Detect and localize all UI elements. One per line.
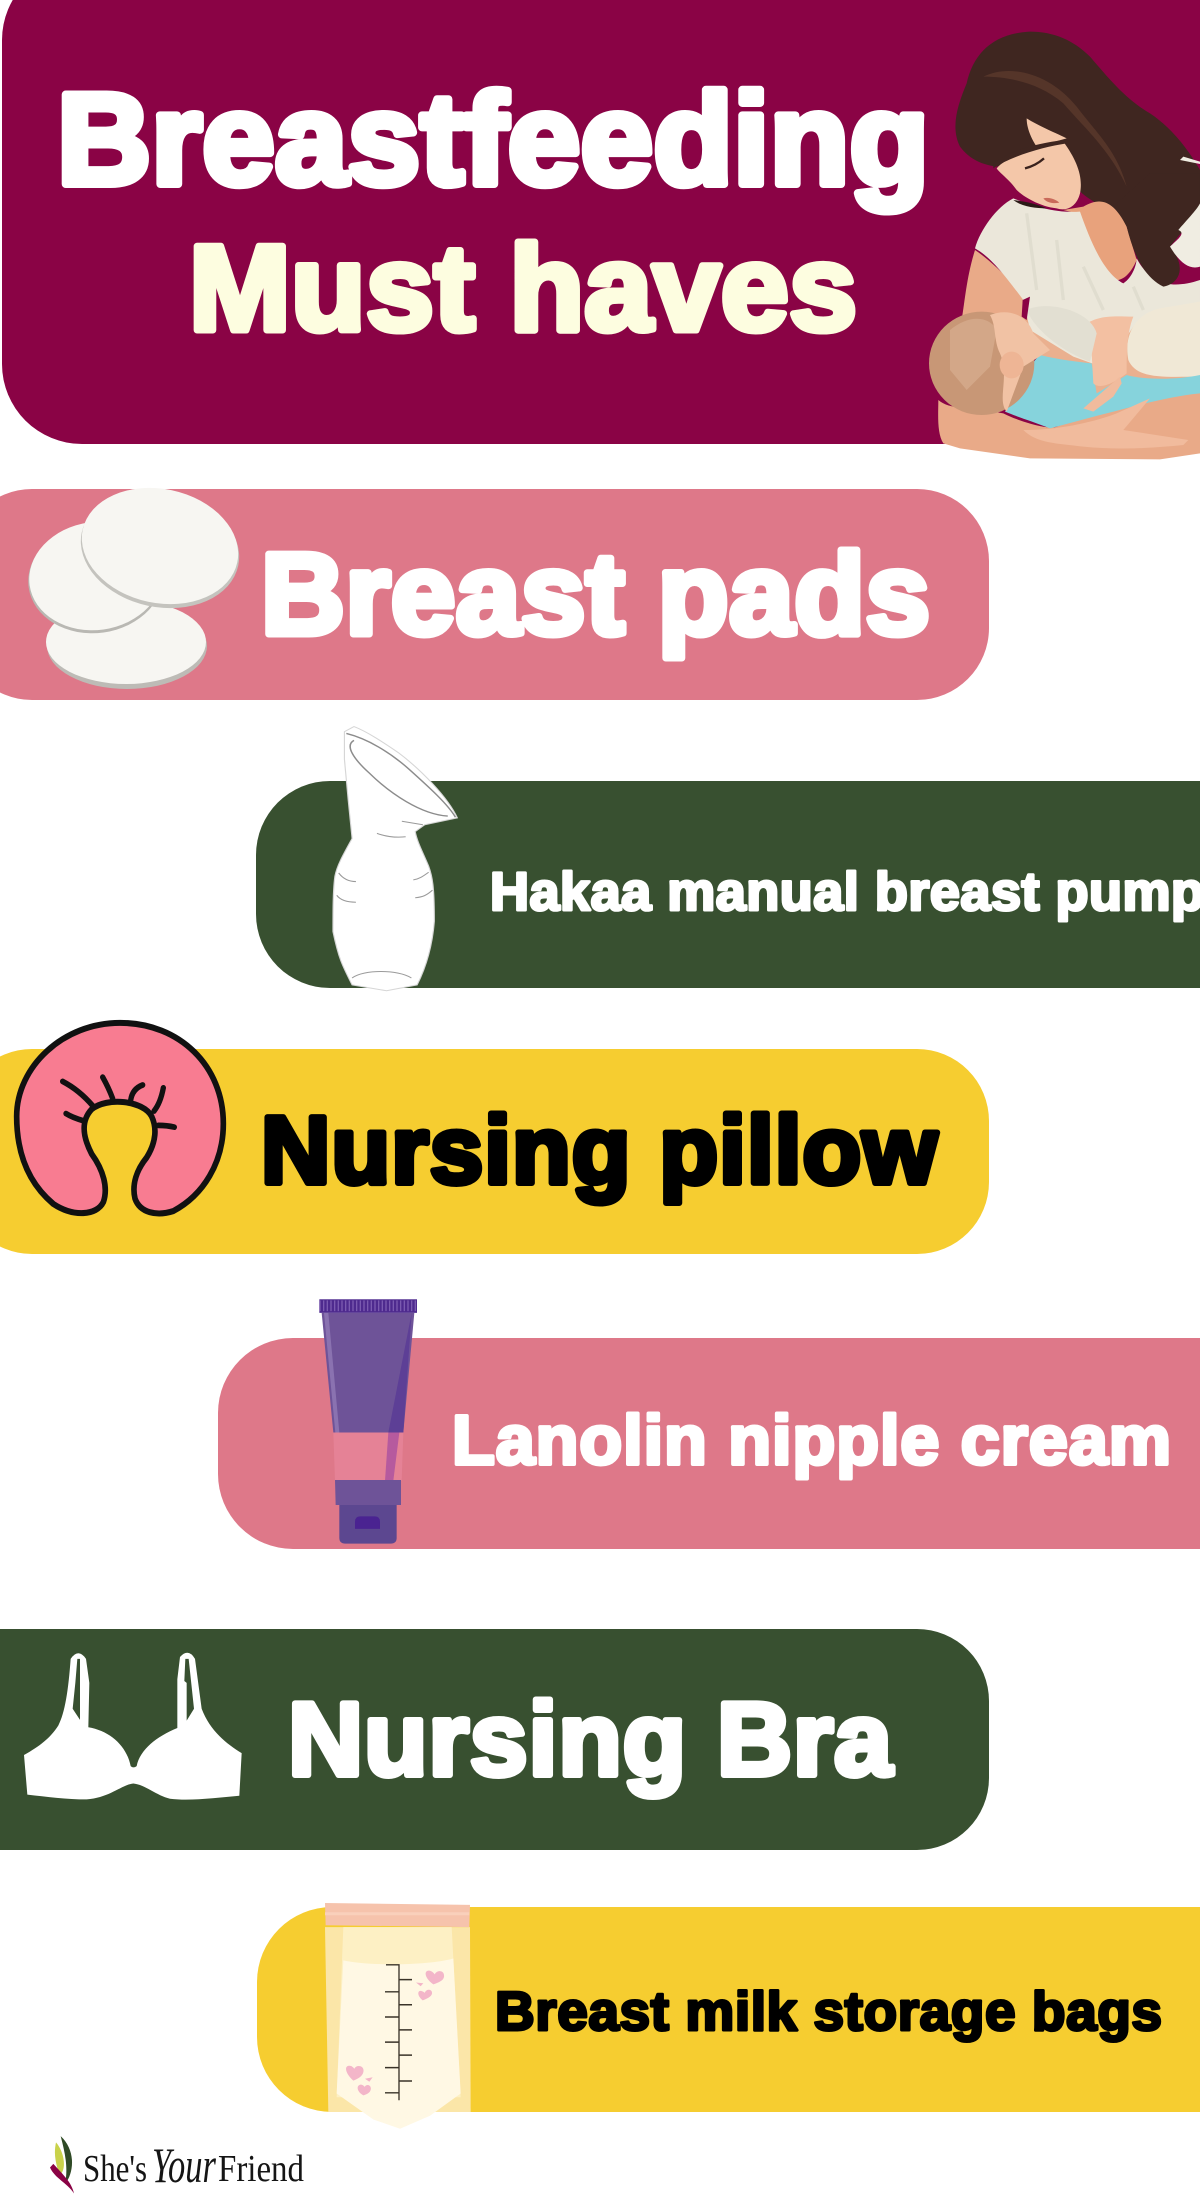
label: Lanolin nipple cream: Lanolin nipple cream [452, 1401, 1171, 1479]
logo: She's Your Friend: Your [152, 2137, 216, 2193]
logo: She's Your Friend: She's [83, 2148, 147, 2190]
panel: nursing bra [0, 1629, 989, 1850]
illustration: mother breastfeeding baby [929, 32, 1200, 459]
panel: Hakaa manual breast pump [256, 727, 1200, 991]
title line 1: Breastfeeding [57, 66, 929, 212]
icon: milk storage bag [325, 1903, 471, 2129]
panel: nursing pillow [0, 1023, 989, 1254]
icon: logo leaves [50, 2136, 74, 2193]
logo: She's Your Friend: Friend [218, 2148, 304, 2190]
label: Nursing pillow: Nursing pillow [261, 1097, 937, 1204]
icon: breast pump [333, 727, 457, 991]
icon: nursing pillow [17, 1023, 223, 1213]
panel: breast pads [0, 474, 989, 700]
title banner [2, 0, 1200, 444]
logo: She's Your Friend [50, 2136, 304, 2193]
icon: cream tube [319, 1299, 417, 1544]
label: Hakaa manual breast pump: Hakaa manual breast pump [490, 862, 1200, 922]
panel: lanolin nipple cream [218, 1299, 1200, 1549]
icon: breast pads [21, 474, 250, 689]
label: Breast milk storage bags: Breast milk storage bags [495, 1980, 1162, 2042]
panel: breast milk storage bags [257, 1903, 1200, 2129]
title line 2: Must haves [189, 220, 857, 356]
label: Nursing Bra: Nursing Bra [288, 1682, 893, 1798]
icon: nursing bra [24, 1653, 242, 1800]
label: Breast pads: Breast pads [261, 529, 930, 659]
